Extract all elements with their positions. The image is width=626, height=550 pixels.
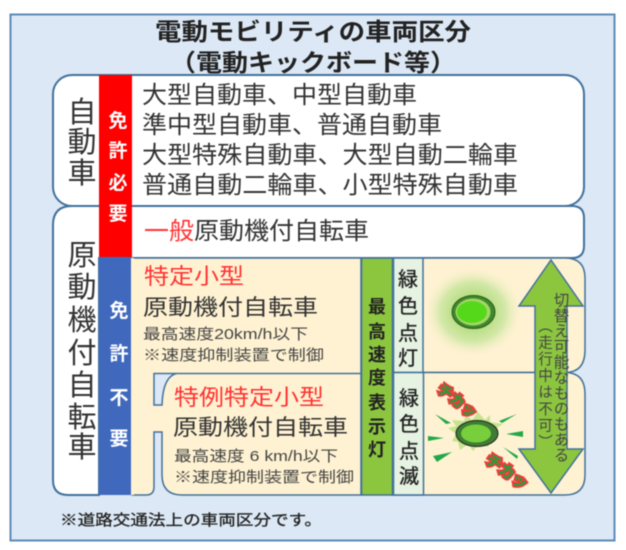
panel: license required: 免: [108, 109, 128, 132]
label: green flashing: 緑: [399, 387, 419, 410]
automobile classes: 準中型自動車、普通自動車: [142, 112, 442, 139]
panel: moped row: [53, 206, 584, 495]
panel: speed indicator lamp: 最: [368, 297, 386, 317]
automobile label: 車: [67, 157, 97, 190]
panel: license not required: 許: [109, 342, 129, 365]
panel: speed indicator lamp: [362, 258, 392, 495]
arrow text: 切替え可能なものもある: [552, 292, 569, 462]
specified small heading: 特定小型: [144, 264, 244, 289]
automobile classes: 大型自動車、中型自動車: [142, 82, 417, 109]
panel: speed indicator lamp: 高: [368, 322, 386, 342]
flash words: [434, 381, 531, 493]
panel: speed indicator lamp: 速: [368, 345, 386, 365]
moped label: 機: [67, 304, 97, 337]
panel: license not required: 要: [109, 429, 129, 450]
panel: speed indicator lamp: 示: [368, 417, 386, 437]
label: green steady: 点: [398, 322, 418, 345]
label: green flashing: 点: [399, 440, 419, 463]
automobile label: 自: [67, 96, 97, 129]
moped label: 自: [67, 369, 97, 402]
moped label: 動: [67, 271, 97, 304]
panel: license required: 要: [108, 204, 128, 225]
automobile classes: 大型特殊自動車、大型自動二輪車: [142, 142, 518, 169]
moped label: 原: [67, 240, 97, 272]
moped label: 転: [67, 401, 97, 434]
panel: license required: [99, 75, 132, 257]
exceptional heading: 特例特定小型: [174, 385, 324, 410]
panel: automobile row: [53, 75, 584, 206]
arrow: switchable range: [519, 260, 583, 493]
flash words: チカッ: [482, 451, 531, 493]
panel: right flashing section: [392, 372, 585, 495]
moped label: 付: [67, 337, 97, 370]
general moped text: 一般原動機付自転車: [144, 218, 369, 245]
specified small notes: 最高速度20km/h以下: [143, 326, 308, 343]
label: green steady: 緑: [398, 268, 418, 291]
panel: speed indicator lamp: 表: [368, 393, 386, 413]
title: [155, 19, 471, 77]
moped label: 車: [67, 431, 97, 464]
panel: license not required: 不: [109, 388, 129, 409]
panel: right steady section: [392, 258, 585, 372]
title: 電動モビリティの車両区分: [155, 19, 471, 46]
flash rays: [428, 414, 523, 462]
panel: speed indicator lamp: 度: [368, 368, 386, 388]
automobile label: [67, 96, 97, 190]
title: （電動キックボード等）: [170, 50, 456, 77]
label: green flashing: 色: [399, 413, 419, 436]
label: green steady: 色: [398, 295, 418, 318]
flash words: チカッ: [434, 381, 479, 422]
label: green steady: [394, 258, 423, 372]
panel: license required: 必: [108, 172, 128, 194]
moped label: [67, 240, 97, 464]
label: green steady: 灯: [398, 347, 418, 370]
panel: speed indicator lamp: 灯: [368, 440, 386, 460]
arrow text: [536, 292, 569, 462]
exceptional notes: 最高速度 6 km/h以下: [174, 448, 338, 465]
icon: flashing green lamp: [428, 381, 531, 493]
label: green flashing: 滅: [399, 465, 419, 488]
specified small body: 原動機付自転車: [143, 295, 318, 320]
panel: specified small and exceptional cream area: ※速度抑制装置で制御: [143, 347, 324, 364]
footnote: ※道路交通法上の車両区分です。: [60, 512, 322, 529]
panel divider and notch: [154, 374, 361, 405]
automobile classes: 普通自動二輪車、小型特殊自動車: [142, 172, 518, 199]
panel: license required: 許: [108, 139, 128, 162]
automobile label: 動: [67, 126, 97, 159]
panel: specified small and exceptional cream area: ※速度抑制装置で制御: [174, 469, 354, 486]
label: green flashing: [394, 372, 424, 495]
arrow text: （走行中は不可）: [536, 318, 552, 451]
panel: license not required: [99, 257, 132, 495]
exceptional body: 原動機付自転車: [173, 415, 348, 440]
panel: specified small and exceptional cream area: [131, 258, 361, 495]
icon: steady green lamp: [423, 266, 523, 358]
panel: license not required: 免: [109, 299, 129, 322]
automobile classes: [142, 82, 518, 199]
